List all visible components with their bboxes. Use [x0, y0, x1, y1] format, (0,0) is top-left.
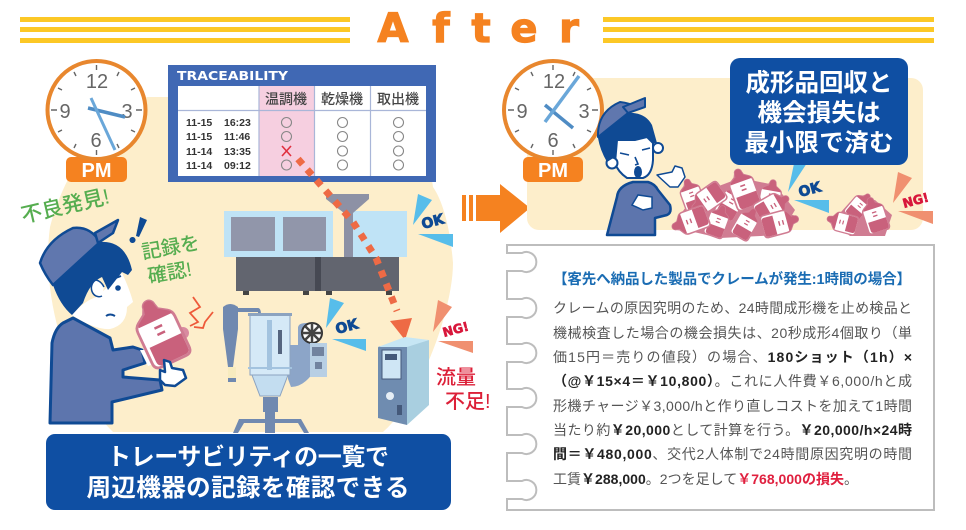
- person: checking bottle: [40, 217, 213, 423]
- traceability table: 取出機: [377, 91, 419, 107]
- clock: right: PM: [538, 160, 568, 182]
- injection molding machine: [224, 194, 407, 295]
- caption: left panel: [46, 434, 451, 510]
- label: check record: 記録を: [140, 232, 201, 264]
- traceability table: 11:46: [224, 131, 250, 143]
- traceability table: 16:23: [224, 117, 251, 129]
- clock: right: 12: [543, 71, 565, 93]
- label: insufficient flow: 不足!: [445, 391, 491, 413]
- clock: left: 6: [90, 130, 102, 152]
- arrow between panels: [462, 184, 530, 233]
- title: A: [378, 6, 409, 52]
- panel: calculation note: [507, 245, 934, 510]
- clock: left: [48, 61, 146, 182]
- callout: minimal loss: 最小限で済む: [744, 129, 894, 157]
- panel: left beige background: [48, 97, 453, 432]
- person: relieved: [598, 98, 685, 235]
- clock: left: 9: [59, 101, 71, 123]
- NG mark: right: [893, 172, 933, 224]
- clock: right: 9: [516, 101, 528, 123]
- label: defect found: 不良発見!: [19, 185, 112, 228]
- NG mark: controller: [433, 300, 473, 353]
- traceability table: 11-14: [186, 146, 212, 158]
- traceability table: 13:35: [224, 146, 251, 158]
- bottle pile: small: [825, 189, 892, 236]
- traceability table: 11-15: [186, 131, 212, 143]
- callout: minimal loss: [730, 58, 908, 165]
- callout: minimal loss: 機会損失は: [758, 99, 880, 127]
- title: e: [510, 6, 538, 52]
- clock: right: 3: [578, 101, 590, 123]
- note body: 形機チャージ￥3,000/hと作り直しコストを加えて1時間: [553, 398, 912, 414]
- callout: minimal loss: 成形品回収と: [746, 69, 892, 97]
- traceability table: TRACEABILITY: [177, 68, 289, 83]
- label: check record: [140, 232, 201, 288]
- clock: right: [504, 61, 602, 182]
- NG mark: right: NG!: [901, 190, 930, 211]
- traceability table: [168, 65, 436, 182]
- caption: left panel: トレーサビリティの一覧で: [107, 444, 389, 471]
- label: insufficient flow: 流量: [436, 366, 476, 389]
- note body: 間＝￥480,000、交代2人体制で24時間原因究明の時間: [553, 446, 912, 462]
- header stripes left: [20, 17, 350, 43]
- traceability table: 温調機: [265, 91, 307, 107]
- caption: left panel: 周辺機器の記録を確認できる: [86, 474, 410, 502]
- OK mark: dryer: OK: [334, 316, 361, 338]
- panel: right beige background: [527, 78, 923, 230]
- traceability table: 11-14: [186, 160, 212, 172]
- traceability table: 乾燥機: [321, 91, 363, 107]
- note body: 工賃￥288,000。2つを足して￥768,000の損失。: [553, 471, 858, 487]
- traceability table: 09:12: [224, 160, 251, 172]
- NG mark: controller: NG!: [441, 319, 470, 340]
- temperature controller: [378, 337, 429, 425]
- bottle pile: large: [669, 166, 801, 242]
- clock: left: 12: [86, 71, 108, 93]
- title: [378, 6, 579, 52]
- label: insufficient flow: [436, 366, 491, 413]
- note body: 当たり約￥20,000として計算を行う。￥20,000/h×24時: [553, 422, 912, 438]
- header stripes right: [603, 17, 934, 43]
- title: t: [471, 6, 491, 52]
- OK mark: dryer: [326, 298, 366, 351]
- note body: （@￥15×4＝￥10,800）。これに人件費￥6,000/hと成: [553, 373, 912, 389]
- traceability table: 11-15: [186, 117, 212, 129]
- label: check record: 確認!: [146, 259, 194, 288]
- clock: left: 3: [121, 101, 133, 123]
- title: f: [432, 6, 450, 52]
- note body: 機械検査した場合の機会損失は、20秒成形4個取り（単: [553, 325, 912, 341]
- clock: left: PM: [82, 160, 112, 182]
- title: r: [559, 6, 579, 52]
- OK mark: right: [788, 159, 829, 213]
- clock: right: 6: [547, 130, 559, 152]
- dotted arrow from table to controller: [298, 159, 412, 340]
- OK mark: molding machine: [413, 194, 453, 247]
- note heading: 【客先へ納品した製品でクレームが発生:1時間の場合】: [553, 270, 911, 288]
- note body: クレームの原因究明のため、24時間成形機を止め検品と: [553, 300, 912, 316]
- note body: [553, 300, 912, 487]
- OK mark: molding machine: OK: [420, 211, 447, 233]
- OK mark: right: OK: [797, 179, 824, 201]
- note body: 価15円＝売りの値段）の場合、180ショット（1h）×: [553, 349, 912, 365]
- dryer equipment: [223, 304, 327, 433]
